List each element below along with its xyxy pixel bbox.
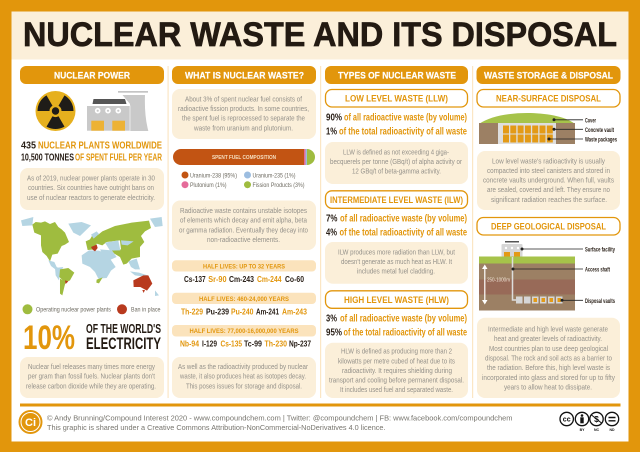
diagram: deep geological repository xyxy=(479,241,615,310)
diagram: near-surface vault: Concrete vault xyxy=(585,127,615,134)
text block: high level definition: transport and cooling before permanent disposal. xyxy=(329,378,464,384)
legend: fuel composition: Fission Products (3%) xyxy=(252,182,304,189)
stats: intermediate level waste: of the total radioactivity of all waste xyxy=(340,227,467,239)
chart: spent fuel composition bar: SPENT FUEL COMPOSITION xyxy=(212,155,276,161)
stats: intermediate level waste xyxy=(326,213,467,239)
icon: nuclear power plant xyxy=(87,91,148,131)
icon: Creative Commons badges: cc xyxy=(563,416,571,424)
subheading: deep geological disposal: DEEP GEOLOGICAL DISPOSAL xyxy=(491,222,606,232)
text block: low level definition: becquerels per tonne (GBq/t) of alpha activity or xyxy=(330,159,463,166)
text block: intermediate level definition: includes metal fuel cladding. xyxy=(357,268,435,276)
subheading: low level waste xyxy=(326,90,468,107)
half lives: 460 to 24,000 years: Am-241 xyxy=(256,307,279,317)
heading: nuclear power: NUCLEAR POWER xyxy=(54,70,130,82)
half lives: 77,000 to 16,000,000 years: Th-230 xyxy=(264,338,287,348)
half lives: up to 32 years: Cs-137 xyxy=(184,274,206,284)
stats: high level waste: 95% xyxy=(326,327,343,339)
half lives: 77,000 to 16,000,000 years: I-129 xyxy=(202,338,217,348)
icon: Compound Interest logo xyxy=(18,410,42,434)
half lives: up to 32 years xyxy=(172,260,316,284)
text block: deep geological description: Intermediate and high level waste generate xyxy=(488,326,608,334)
legend: operating plants and bans: Ban in place xyxy=(131,306,161,314)
text block: high level definition: It includes used fuel and separated waste. xyxy=(340,387,453,394)
subheading: high level waste xyxy=(326,291,468,308)
stat: tonnes of spent fuel xyxy=(21,152,162,164)
half lives: 77,000 to 16,000,000 years: Nb-94 xyxy=(180,338,199,348)
panel: what is nuclear waste xyxy=(172,66,316,398)
world map xyxy=(21,217,163,296)
icon: Creative Commons badges: NC xyxy=(594,428,599,432)
icon: Creative Commons badges: $ xyxy=(594,414,599,424)
panel: waste storage and disposal xyxy=(476,66,620,398)
legend: operating plants and bans xyxy=(22,304,161,314)
text block: low level definition: 12 GBq/t of beta-gamma activity. xyxy=(352,168,441,176)
text block: low level definition: LLW is defined as not exceeding 4 giga- xyxy=(343,149,450,156)
text block: heat from decay xyxy=(172,357,316,398)
text block: deep geological description: incorporated into glass and stored for up to fifty xyxy=(482,375,615,382)
stats: low level waste: 1% xyxy=(326,126,337,138)
text block: heat from decay: waste, it also produces heat as isotopes decay. xyxy=(179,374,306,380)
stats: high level waste xyxy=(326,313,467,339)
stat: tonnes of spent fuel: OF SPENT FUEL PER YEAR xyxy=(75,152,162,164)
text block: spent fuel intro: radioactive fission products. In some countries, xyxy=(178,106,309,113)
text block: spent fuel intro: the spent fuel is reprocessed to separate the xyxy=(182,116,305,122)
text block: radioactive decay: Radioactive waste contains unstable isotopes xyxy=(180,208,307,215)
stat: 10 percent of electricity: ELECTRICITY xyxy=(86,335,161,353)
text block: deep geological description: disposal. The rock and soil acts as a barrier to xyxy=(485,356,612,362)
heading: waste storage and disposal xyxy=(476,66,620,84)
diagram: near-surface vault: Waste packages xyxy=(585,136,617,144)
diagram: near-surface vault: Cover xyxy=(585,117,596,124)
subheading: low level waste: LOW LEVEL WASTE (LLW) xyxy=(345,94,448,104)
heading: waste storage and disposal: WASTE STORAGE & DISPOSAL xyxy=(484,70,613,82)
half lives: up to 32 years: HALF LIVES: UP TO 32 YEARS xyxy=(203,263,286,270)
text block: energy per gram xyxy=(20,357,164,398)
half lives: 460 to 24,000 years: Pu-239 xyxy=(206,307,229,317)
half lives: up to 32 years: Co-60 xyxy=(285,274,304,284)
stat: 10 percent of electricity: 10% xyxy=(23,319,75,357)
text block: radioactive decay: of elements which decay and emit alpha, beta xyxy=(180,218,307,224)
text block: near-surface description: significant radiation reaches the surface. xyxy=(491,197,607,204)
text block: radioactive decay: or gamma radiation. Eventually they decay into xyxy=(179,228,308,234)
text block: spent fuel intro: About 3% of spent nuclear fuel consists of xyxy=(185,96,302,104)
diagram: deep geological repository: Access shaft xyxy=(585,266,611,274)
stats: low level waste: of the total radioactivity of all waste xyxy=(339,126,467,138)
text block: radioactive decay: non-radioactive elements. xyxy=(207,237,280,244)
text block: countries operating plants: As of 2019, nuclear power plants operate in 30 xyxy=(27,176,155,182)
heading: what is nuclear waste: WHAT IS NUCLEAR WASTE? xyxy=(185,70,304,82)
text block: near-surface description: compacted into steel canisters and stored in xyxy=(487,168,610,175)
stat: 10 percent of electricity: OF THE WORLD'S xyxy=(86,322,161,336)
text block: countries operating plants xyxy=(20,168,164,210)
legend: fuel composition: Uranium-238 (95%) xyxy=(190,172,237,179)
legend: fuel composition: Plutonium (1%) xyxy=(190,182,226,189)
half lives: 460 to 24,000 years: Pu-240 xyxy=(231,307,254,317)
stats: high level waste: 3% xyxy=(326,313,337,325)
text block: heat from decay: This poses issues for storage and disposal. xyxy=(186,383,302,390)
diagram: near-surface vault xyxy=(479,113,617,144)
panel: nuclear power xyxy=(20,66,164,398)
half lives: 77,000 to 16,000,000 years: Np-237 xyxy=(289,338,311,348)
subheading: near-surface disposal: NEAR-SURFACE DISPOSAL xyxy=(496,94,601,104)
subheading: intermediate level waste xyxy=(326,191,468,208)
text block: near-surface description: Low level waste's radioactivity is usually xyxy=(492,158,605,165)
text block: spent fuel intro: waste from uranium and plutonium. xyxy=(193,126,293,132)
stats: intermediate level waste: 7% xyxy=(326,213,338,225)
icon: Compound Interest logo: Ci xyxy=(25,417,36,429)
stat: tonnes of spent fuel: 10,500 TONNES xyxy=(21,152,74,164)
text block: low level definition xyxy=(325,142,468,184)
text block: deep geological description: the radiation. Before this, high level waste is xyxy=(487,365,610,372)
text block: deep geological description: years to allow heat to dissipate. xyxy=(504,384,592,392)
half lives: up to 32 years: Cm-244 xyxy=(257,274,282,284)
diagram: deep geological repository: Disposal vaults xyxy=(585,298,615,305)
stats: low level waste: of all radioactive waste (by volume) xyxy=(344,112,467,124)
heading: types of nuclear waste xyxy=(325,66,468,84)
subheading: high level waste: HIGH LEVEL WASTE (HLW) xyxy=(344,295,449,305)
text block: countries operating plants: countries. Six countries have outright bans on xyxy=(28,185,154,192)
half lives: 77,000 to 16,000,000 years: Tc-99 xyxy=(244,338,262,348)
text block: deep geological description xyxy=(477,318,620,398)
subheading: deep geological disposal xyxy=(477,218,620,235)
stats: high level waste: of the total radioactivity of all waste xyxy=(344,327,467,339)
half lives: up to 32 years: Cm-243 xyxy=(229,274,254,284)
subheading: near-surface disposal xyxy=(477,90,620,107)
text block: high level definition xyxy=(325,343,468,398)
text block: near-surface description: concrete vaults underground. When full, vaults xyxy=(483,178,614,184)
icon: Creative Commons badges: ND xyxy=(609,428,615,432)
icon: radiation symbol xyxy=(36,91,76,131)
text block: high level definition: HLW is defined as producing more than 2 xyxy=(341,348,452,356)
heading: nuclear power xyxy=(20,66,164,84)
stat: nuclear plants worldwide xyxy=(21,140,162,152)
text block: high level definition: kilowatts per metre cubed of heat due to its xyxy=(338,358,455,365)
heading: what is nuclear waste xyxy=(172,66,316,84)
half lives: 77,000 to 16,000,000 years: Cs-135 xyxy=(220,338,242,348)
half lives: 460 to 24,000 years: Th-229 xyxy=(181,307,203,317)
text block: energy per gram: Nuclear fuel releases many times more energy xyxy=(28,364,155,371)
stat: nuclear plants worldwide: 435 xyxy=(21,140,36,152)
stat: nuclear plants worldwide: NUCLEAR PLANTS WORLDWIDE xyxy=(38,140,162,152)
text block: deep geological description: heat and greater levels of radioactivity. xyxy=(494,336,602,343)
text block: deep geological description: Most countries plan to use deep geological xyxy=(489,346,608,353)
chart: spent fuel composition bar xyxy=(173,149,315,165)
text block: energy per gram: per gram than fossil fuels. Nuclear plants don't xyxy=(28,374,155,380)
legend: fuel composition: Uranium-235 (1%) xyxy=(252,172,296,179)
diagram: deep geological repository: Surface facility xyxy=(585,246,615,254)
text block: near-surface description xyxy=(477,151,620,210)
stats: intermediate level waste: of all radioactive waste (by volume) xyxy=(340,213,467,225)
licence line: This graphic is shared under a Creative Commons Attribution-NonCommercial-NoDerivatives 4.0 licence. xyxy=(47,423,386,432)
text block: radioactive decay xyxy=(172,200,316,250)
text block: high level definition: radioactivity. It requires shielding during xyxy=(342,368,452,375)
half lives: 460 to 24,000 years xyxy=(172,293,316,317)
text block: intermediate level definition: ILW produces more radiation than LLW, but xyxy=(338,250,455,256)
stat: 10 percent of electricity xyxy=(23,319,161,357)
icon: Creative Commons badges xyxy=(560,412,619,432)
panel: types of nuclear waste xyxy=(325,66,468,398)
legend: operating plants and bans: Operating nuclear power plants xyxy=(36,306,112,314)
stats: intermediate level waste: 4% xyxy=(326,227,337,239)
half lives: 77,000 to 16,000,000 years: HALF LIVES: 77,000-16,000,000 YEARS xyxy=(190,328,299,335)
stats: high level waste: of all radioactive waste (by volume) xyxy=(340,313,467,325)
text block: heat from decay: As well as the radioactivity produced by nuclear xyxy=(178,364,309,371)
half lives: 77,000 to 16,000,000 years xyxy=(172,325,316,348)
legend: fuel composition xyxy=(182,172,304,189)
stats: low level waste xyxy=(326,112,467,138)
title: NUCLEAR WASTE AND ITS DISPOSAL xyxy=(23,16,617,54)
diagram: deep geological repository: 250-1000m xyxy=(487,278,510,284)
footer xyxy=(18,404,620,434)
text block: intermediate level definition: doesn't generate as much heat as HLW. It xyxy=(341,259,452,266)
subheading: intermediate level waste: INTERMEDIATE LEVEL WASTE (ILW) xyxy=(330,195,463,205)
half lives: 460 to 24,000 years: Am-243 xyxy=(282,307,307,317)
half lives: up to 32 years: Sr-90 xyxy=(208,274,227,284)
text block: intermediate level definition xyxy=(325,242,468,284)
credit line: © Andy Brunning/Compound Interest 2020 - www.compoundchem.com | Twitter: @compoundchem | FB: www.facebook.com/compoundchem xyxy=(47,414,512,422)
stats: low level waste: 90% xyxy=(326,112,343,124)
half lives: 460 to 24,000 years: HALF LIVES: 460-24,000 YEARS xyxy=(199,296,290,303)
icon: Creative Commons badges: BY xyxy=(580,428,585,432)
heading: types of nuclear waste: TYPES OF NUCLEAR WASTE xyxy=(338,70,456,82)
text block: energy per gram: release carbon dioxide while they are operating. xyxy=(26,383,156,390)
text block: countries operating plants: use of nuclear reactors to generate electricity. xyxy=(27,195,155,202)
text block: spent fuel intro xyxy=(172,89,316,139)
text block: near-surface description: are sealed, covered and left. They ensure no xyxy=(487,187,610,194)
